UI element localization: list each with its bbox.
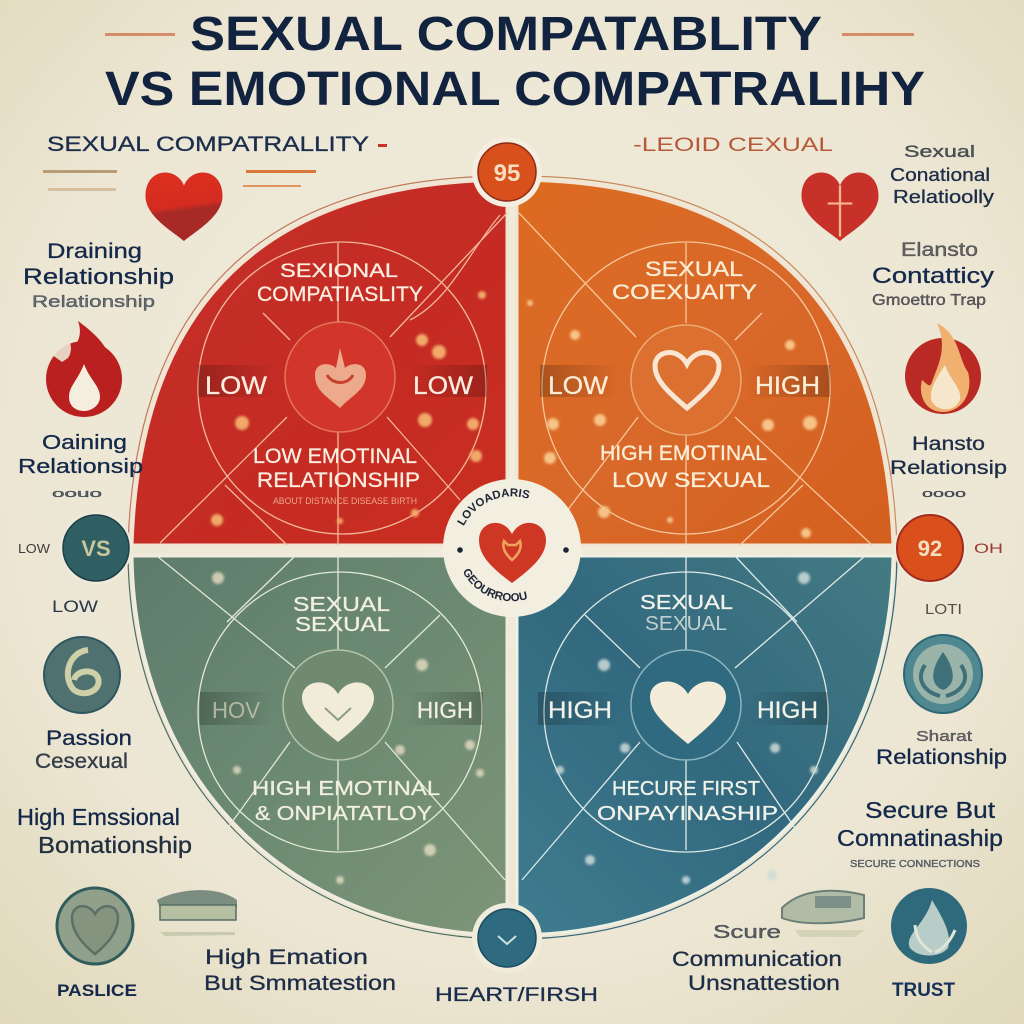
right labels: sexual relationally: Conational xyxy=(890,165,990,185)
icon: left red heart xyxy=(146,172,222,241)
dim left value in green quadrant: HOV xyxy=(212,697,261,723)
right labels: relationship xyxy=(876,728,1007,769)
left top labels: draining relationship: Relationship xyxy=(32,292,155,311)
bottom label: secure communication: Communication xyxy=(672,948,842,971)
panel: red low low quadrant: LOW EMOTINAL xyxy=(253,445,417,468)
right labels: contatticy trap: Contatticy xyxy=(872,263,994,288)
panel: orange low high quadrant xyxy=(517,176,897,545)
icon: passion swirl xyxy=(44,637,120,713)
right labels: secure but companionship xyxy=(837,797,1003,870)
right labels: secure but companionship: Secure But xyxy=(865,797,996,823)
center heart badge: LOVOADARIS xyxy=(457,488,530,526)
left labels: low: LOW xyxy=(18,541,51,556)
left VS badge xyxy=(60,512,132,584)
center heart badge: GEOURROOU xyxy=(464,569,527,602)
bottom heart badge xyxy=(472,903,542,973)
left labels: oaining relationship: Oaining xyxy=(42,432,127,454)
panel: green high emotional quadrant: HIGH xyxy=(417,697,473,723)
left top labels: draining relationship xyxy=(23,240,174,311)
right score badge: 92 xyxy=(918,536,942,561)
panel: red low low quadrant: LOW xyxy=(205,372,267,400)
left labels: oaining relationship: oouo xyxy=(52,488,102,500)
bottom label: secure communication: Scure xyxy=(713,922,781,942)
left labels: passion: Passion xyxy=(46,727,132,750)
left labels: high emotional relationship: High Emssional xyxy=(17,804,180,830)
panel: blue high high quadrant: ONPAYINASHIP xyxy=(597,803,778,825)
panel: green high emotional quadrant: & ONPIATATLOY xyxy=(255,803,432,825)
right labels: secure but companionship: Comnatinaship xyxy=(837,825,1003,851)
right labels: hansto relationship xyxy=(890,434,1007,500)
right labels: contatticy trap xyxy=(872,240,994,309)
panel: red low low quadrant: RELATIONSHIP xyxy=(257,469,420,492)
panel: green high emotional quadrant: SEXUAL xyxy=(293,594,390,616)
icon: trust flame xyxy=(891,888,967,964)
top score badge xyxy=(472,137,542,207)
icon: right heart with cross xyxy=(802,172,878,241)
right labels: contatticy trap: Elansto xyxy=(901,240,978,261)
right score badge xyxy=(894,512,966,584)
right labels: secure but companionship: SECURE CONNECTIONS xyxy=(850,859,980,870)
right labels: hansto relationship: Relationsip xyxy=(890,458,1007,479)
right labels: relationship: Sharat xyxy=(916,728,973,745)
panel: blue high high quadrant: HIGH xyxy=(757,697,818,724)
icon: right laptop device xyxy=(782,891,865,937)
dim second heading in blue quadrant: SEXUAL xyxy=(645,613,727,635)
left labels: low xyxy=(18,541,98,616)
bottom label: secure communication xyxy=(672,922,842,995)
panel: orange low high quadrant: LOW xyxy=(548,372,608,400)
panel: red low low quadrant: COMPATIASLITY xyxy=(257,283,423,306)
panel: red low low quadrant: SEXIONAL xyxy=(280,261,398,282)
label: trust: TRUST xyxy=(892,980,955,1001)
left labels: passion: Cesexual xyxy=(35,750,128,773)
panel: green high emotional quadrant: HIGH EMOTINAL xyxy=(252,778,440,800)
left labels: passion xyxy=(35,727,132,773)
panel: orange low high quadrant: COEXUAITY xyxy=(612,281,757,304)
center heart badge xyxy=(443,479,581,617)
left labels: high emotional relationship: Bomationship xyxy=(38,832,192,858)
bottom label: high emotion: High Emation xyxy=(205,946,368,969)
right column heading: -LEOID CEXUAL xyxy=(633,135,833,156)
left top labels: draining relationship: Draining xyxy=(47,240,142,263)
panel: red low low quadrant xyxy=(128,176,507,545)
panel: blue high high quadrant xyxy=(517,556,897,939)
bottom label: heart first: HEART/FIRSH xyxy=(435,985,598,1006)
panel: orange low high quadrant: LOW SEXUAL xyxy=(612,469,770,492)
left labels: oaining relationship: Relationsip xyxy=(18,456,143,478)
panel: blue high high quadrant: SEXUAL xyxy=(640,592,733,614)
icon: right flame xyxy=(905,323,981,414)
panel: red low low quadrant: LOW xyxy=(413,372,473,400)
left labels: low: LOW xyxy=(52,597,98,616)
bottom label: high emotion: But Smmatestion xyxy=(204,972,396,995)
panel: orange low high quadrant: HIGH EMOTINAL xyxy=(600,442,767,465)
icon: left flame xyxy=(46,321,122,417)
right labels: oh and low xyxy=(925,540,1003,618)
left VS badge: VS xyxy=(81,536,111,561)
top score badge: 95 xyxy=(494,160,520,187)
right labels: sexual relationally xyxy=(890,142,994,207)
title xyxy=(105,8,925,116)
icon: passage heart xyxy=(57,888,133,964)
panel: green high emotional quadrant xyxy=(128,556,507,939)
left top labels: draining relationship: Relationship xyxy=(23,264,174,289)
icon: relationship lotus xyxy=(904,635,982,713)
right labels: oh and low: LOTI xyxy=(925,601,962,618)
left labels: oaining relationship xyxy=(18,432,143,500)
left column heading xyxy=(43,133,387,191)
right labels: relationship: Relationship xyxy=(876,746,1007,769)
left labels: high emotional relationship xyxy=(17,804,192,858)
panel: orange low high quadrant: HIGH xyxy=(755,372,820,400)
right labels: hansto relationship: Hansto xyxy=(912,434,985,455)
right labels: sexual relationally: Relatioolly xyxy=(893,187,994,207)
small caption in red quadrant: ABOUT DISTANCE DISEASE BIRTH xyxy=(273,496,417,506)
panel: green high emotional quadrant: SEXUAL xyxy=(295,614,390,636)
bottom label: high emotion xyxy=(204,946,396,995)
title: VS EMOTIONAL COMPATRALIHY xyxy=(105,63,925,116)
left column heading: SEXUAL COMPATRALLITY xyxy=(47,133,369,156)
icon: left book xyxy=(157,890,237,936)
right labels: sexual relationally: Sexual xyxy=(904,142,975,161)
label: passice: PASLICE xyxy=(57,981,137,1000)
quadrant chart xyxy=(128,176,897,939)
right labels: contatticy trap: Gmoettro Trap xyxy=(872,292,986,309)
panel: blue high high quadrant: HIGH xyxy=(548,697,612,724)
right labels: hansto relationship: oooo xyxy=(922,488,966,500)
panel: blue high high quadrant: HECURE FIRST xyxy=(612,778,760,800)
title: SEXUAL COMPATABLITY xyxy=(190,8,822,61)
right labels: oh and low: OH xyxy=(974,540,1003,556)
bottom label: secure communication: Unsnattestion xyxy=(688,972,840,995)
panel: orange low high quadrant: SEXUAL xyxy=(645,258,743,281)
